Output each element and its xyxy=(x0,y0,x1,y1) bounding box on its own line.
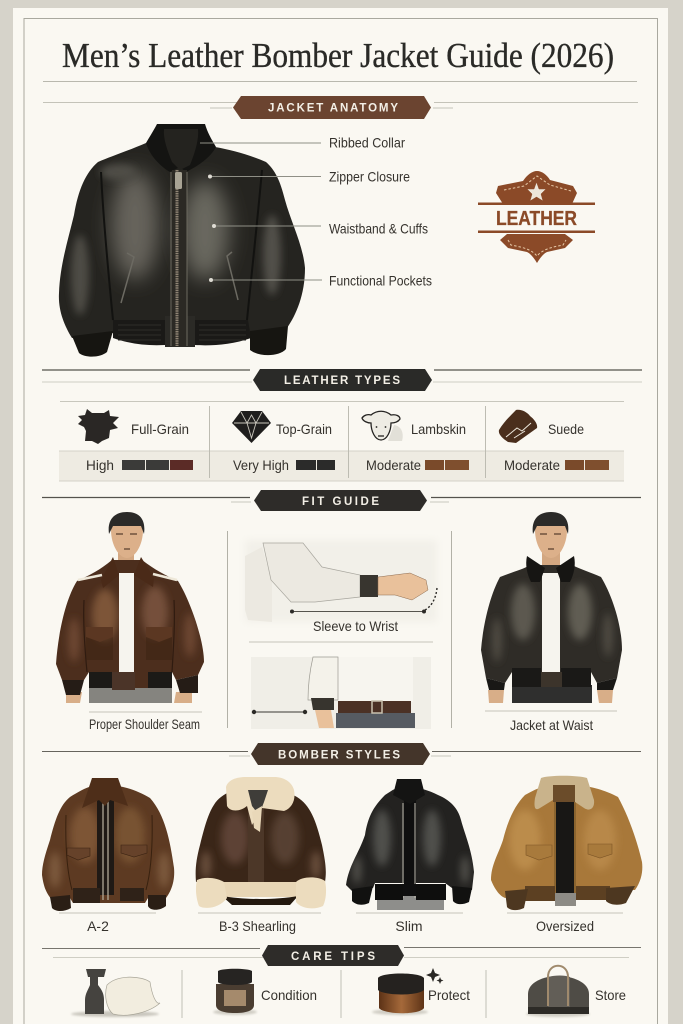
row: very high: Very High xyxy=(233,457,289,473)
waistband xyxy=(113,320,251,345)
label: jacket at waist xyxy=(485,711,617,733)
panel: sleeve to wrist xyxy=(245,540,437,634)
label: A-2 xyxy=(59,913,156,934)
section header: jacket anatomy xyxy=(43,96,638,119)
row: very high xyxy=(233,457,335,473)
label: store: Store xyxy=(595,987,626,1003)
cuffs xyxy=(72,331,113,357)
section header: jacket anatomy: JACKET ANATOMY xyxy=(268,102,398,114)
illustration: oversized tan jacket xyxy=(491,776,642,910)
illustration: man in brown jacket xyxy=(56,512,204,703)
label: protect: Protect xyxy=(428,987,470,1003)
row: lambskin moderate: Moderate xyxy=(366,457,421,473)
badge: leather xyxy=(478,171,595,263)
icon: spray bottle and cloth xyxy=(71,969,160,1017)
icon: full-grain hide xyxy=(78,409,119,444)
icon: suede swatch xyxy=(499,410,537,443)
pockets xyxy=(121,253,134,303)
label: oversized: Oversized xyxy=(536,918,594,934)
icon: lamb head xyxy=(362,411,403,441)
section header: fit guide: FIT GUIDE xyxy=(302,496,379,508)
label: B-3 shearling: B-3 Shearling xyxy=(219,918,296,934)
row: lambskin moderate xyxy=(366,457,469,473)
illustration: B-3 shearling jacket xyxy=(196,777,326,908)
anatomy callouts xyxy=(200,134,432,288)
label: ribbed collar: Ribbed Collar xyxy=(329,134,405,150)
section header: leather types xyxy=(42,369,642,391)
label: proper shoulder seam: Proper Shoulder Seam xyxy=(89,716,200,732)
icon: conditioner jar xyxy=(213,969,257,1015)
label: condition: Condition xyxy=(261,987,317,1003)
icon: protect jar xyxy=(372,968,444,1015)
collar xyxy=(146,124,216,172)
illustration: slim black jacket xyxy=(346,779,474,910)
label: sleeve to wrist: Sleeve to Wrist xyxy=(313,618,398,634)
label: A-2: A-2 xyxy=(87,918,109,934)
section header: bomber styles: BOMBER STYLES xyxy=(278,750,400,762)
label: waistband and cuffs: Waistband & Cuffs xyxy=(329,220,428,236)
panel: leather types table xyxy=(59,402,624,481)
panel: jacket at waist xyxy=(251,657,431,729)
illustration: A-2 jacket xyxy=(42,778,174,911)
label: lambskin: Lambskin xyxy=(411,421,466,437)
illustration: man in dark jacket xyxy=(481,512,622,703)
label: functional pockets: Functional Pockets xyxy=(329,272,432,288)
label: jacket at waist: Jacket at Waist xyxy=(510,717,593,733)
title: Men’s Leather Bomber Jacket Guide (2026) xyxy=(62,36,614,75)
label: slim xyxy=(356,913,463,934)
label: slim: Slim xyxy=(395,918,423,934)
label: zipper closure: Zipper Closure xyxy=(329,168,410,184)
badge: leather: LEATHER xyxy=(496,208,577,230)
section header: leather types: LEATHER TYPES xyxy=(284,375,400,387)
label: suede: Suede xyxy=(548,421,584,437)
label: full-grain: Full-Grain xyxy=(131,421,189,437)
row: suede moderate: Moderate xyxy=(504,457,560,473)
icon: diamond xyxy=(232,411,271,443)
label: proper shoulder seam xyxy=(89,712,202,732)
label: B-3 shearling xyxy=(198,913,321,934)
icon: storage bag xyxy=(526,966,590,1017)
row: high xyxy=(86,457,193,473)
section header: fit guide xyxy=(42,490,641,511)
section header: care tips: CARE TIPS xyxy=(291,951,375,963)
row: high: High xyxy=(86,457,114,473)
row: suede moderate xyxy=(504,457,609,473)
section header: bomber styles xyxy=(42,743,641,765)
illustration: black leather bomber jacket xyxy=(59,124,305,357)
label: oversized xyxy=(507,913,623,934)
zipper xyxy=(172,170,187,346)
section header: care tips xyxy=(42,945,641,966)
label: top-grain: Top-Grain xyxy=(276,421,332,437)
